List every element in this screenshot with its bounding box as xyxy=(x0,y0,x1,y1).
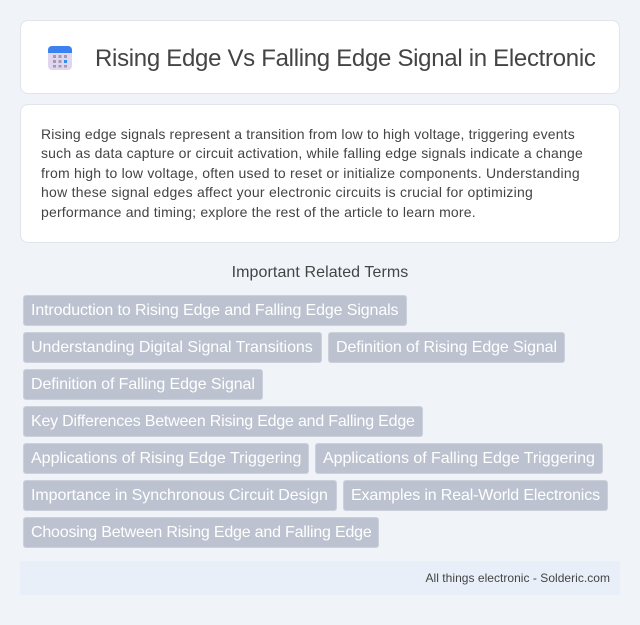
tag: transitions xyxy=(23,332,322,363)
tag: rising definition: Definition of Rising Edge Signal xyxy=(336,339,557,356)
icon: calendar xyxy=(48,46,72,70)
related term tags xyxy=(23,295,608,548)
tag: choosing: Choosing Between Rising Edge and Falling Edge xyxy=(31,524,372,541)
description text: how these signal edges affect your electronic circuits is crucial for optimizing xyxy=(41,184,533,200)
description text xyxy=(41,126,583,220)
tag: key differences: Key Differences Between Rising Edge and Falling Edge xyxy=(31,413,415,430)
tag: falling applications: Applications of Falling Edge Triggering xyxy=(323,450,595,467)
footer bar xyxy=(20,561,620,595)
header panel xyxy=(20,20,620,94)
footer bar: All things electronic - Solderic.com xyxy=(426,571,610,585)
description text: from high to low voltage, often used to reset or initialize components. Understanding xyxy=(41,165,580,181)
tag: falling definition xyxy=(23,369,263,400)
tag: falling definition: Definition of Falling Edge Signal xyxy=(31,376,255,393)
tag: synchronous design: Importance in Synchronous Circuit Design xyxy=(31,487,328,504)
tag: choosing xyxy=(23,517,379,548)
description text: such as data capture or circuit activation, while falling edge signals indicate a change xyxy=(41,145,583,161)
tag: transitions: Understanding Digital Signal Transitions xyxy=(31,339,313,356)
title: Rising Edge Vs Falling Edge Signal in Electronic xyxy=(95,45,596,72)
tag: synchronous design xyxy=(23,480,337,511)
description text: Rising edge signals represent a transition from low to high voltage, triggering events xyxy=(41,126,575,142)
tag: falling applications xyxy=(315,443,603,474)
heading: related terms: Important Related Terms xyxy=(232,264,408,281)
panel: description xyxy=(20,104,620,243)
tag: introduction xyxy=(23,295,407,326)
tag: key differences xyxy=(23,406,423,437)
tag: real-world examples xyxy=(343,480,608,511)
tag: rising applications xyxy=(23,443,309,474)
tag: real-world examples: Examples in Real-World Electronics xyxy=(351,487,600,504)
tag: rising definition xyxy=(328,332,565,363)
tag: rising applications: Applications of Rising Edge Triggering xyxy=(31,450,301,467)
tag: introduction: Introduction to Rising Edge and Falling Edge Signals xyxy=(31,302,398,319)
description text: performance and timing; explore the rest of the article to learn more. xyxy=(41,204,476,220)
